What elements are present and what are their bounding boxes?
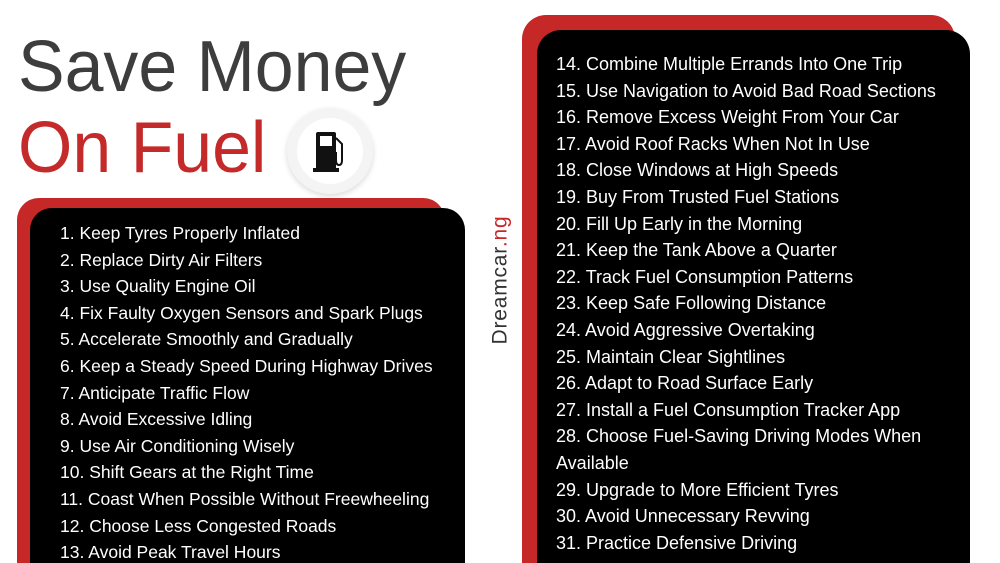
list: tips 14-31: 18. Close Windows at High Speeds <box>556 160 838 180</box>
list: tips 14-31: 15. Use Navigation to Avoid Bad Road Sections <box>556 81 936 101</box>
list: tips 14-31: 27. Install a Fuel Consumption Tracker App <box>556 400 900 420</box>
brand: Dreamcar.ng: Dreamcar.ng <box>488 215 512 345</box>
list: tips 14-31: 23. Keep Safe Following Distance <box>556 293 826 313</box>
list: tips 14-31: 21. Keep the Tank Above a Quarter <box>556 240 837 260</box>
list: tips 14-31: 29. Upgrade to More Efficient Tyres <box>556 480 838 500</box>
list: tips 1-13: 8. Avoid Excessive Idling <box>60 409 252 429</box>
list: tips 14-31: 19. Buy From Trusted Fuel Stations <box>556 187 839 207</box>
list: tips 1-13: 11. Coast When Possible Without Freewheeling <box>60 489 429 509</box>
panel: right list <box>522 15 970 563</box>
list: tips 1-13: 9. Use Air Conditioning Wisely <box>60 436 294 456</box>
list: tips 14-31: 25. Maintain Clear Sightlines <box>556 347 785 367</box>
list: tips 14-31: 30. Avoid Unnecessary Revving <box>556 506 810 526</box>
list: tips 1-13: 6. Keep a Steady Speed During Highway Drives <box>60 356 433 376</box>
panel: left list <box>17 198 465 563</box>
list: tips 1-13: 10. Shift Gears at the Right Time <box>60 462 314 482</box>
title <box>18 27 406 188</box>
list: tips 1-13: 7. Anticipate Traffic Flow <box>60 383 249 403</box>
list: tips 14-31: 28. Choose Fuel-Saving Driving Modes When Available <box>556 426 921 473</box>
list: tips 1-13: 4. Fix Faulty Oxygen Sensors and Spark Plugs <box>60 303 423 323</box>
list: tips 14-31: 31. Practice Defensive Driving <box>556 533 797 553</box>
list: tips 1-13: 1. Keep Tyres Properly Inflated <box>60 223 300 243</box>
list: tips 14-31: 26. Adapt to Road Surface Early <box>556 373 813 393</box>
list: tips 14-31: 14. Combine Multiple Errands Into One Trip <box>556 54 902 74</box>
list: tips 1-13 <box>60 223 433 562</box>
icon: fuel pump <box>287 108 373 194</box>
list: tips 1-13: 5. Accelerate Smoothly and Gradually <box>60 329 353 349</box>
list: tips 14-31: 20. Fill Up Early in the Morning <box>556 214 802 234</box>
list: tips 14-31: 16. Remove Excess Weight From Your Car <box>556 107 899 127</box>
list: tips 1-13: 2. Replace Dirty Air Filters <box>60 250 262 270</box>
title line 1: Save Money <box>18 27 406 107</box>
list: tips 14-31 <box>556 54 936 553</box>
title line 2: On Fuel <box>18 108 266 188</box>
list: tips 1-13: 13. Avoid Peak Travel Hours <box>60 542 280 562</box>
list: tips 14-31: 17. Avoid Roof Racks When Not In Use <box>556 134 870 154</box>
list: tips 14-31: 24. Avoid Aggressive Overtaking <box>556 320 815 340</box>
list: tips 1-13: 3. Use Quality Engine Oil <box>60 276 256 296</box>
list: tips 14-31: 22. Track Fuel Consumption Patterns <box>556 267 853 287</box>
list: tips 1-13: 12. Choose Less Congested Roads <box>60 516 336 536</box>
